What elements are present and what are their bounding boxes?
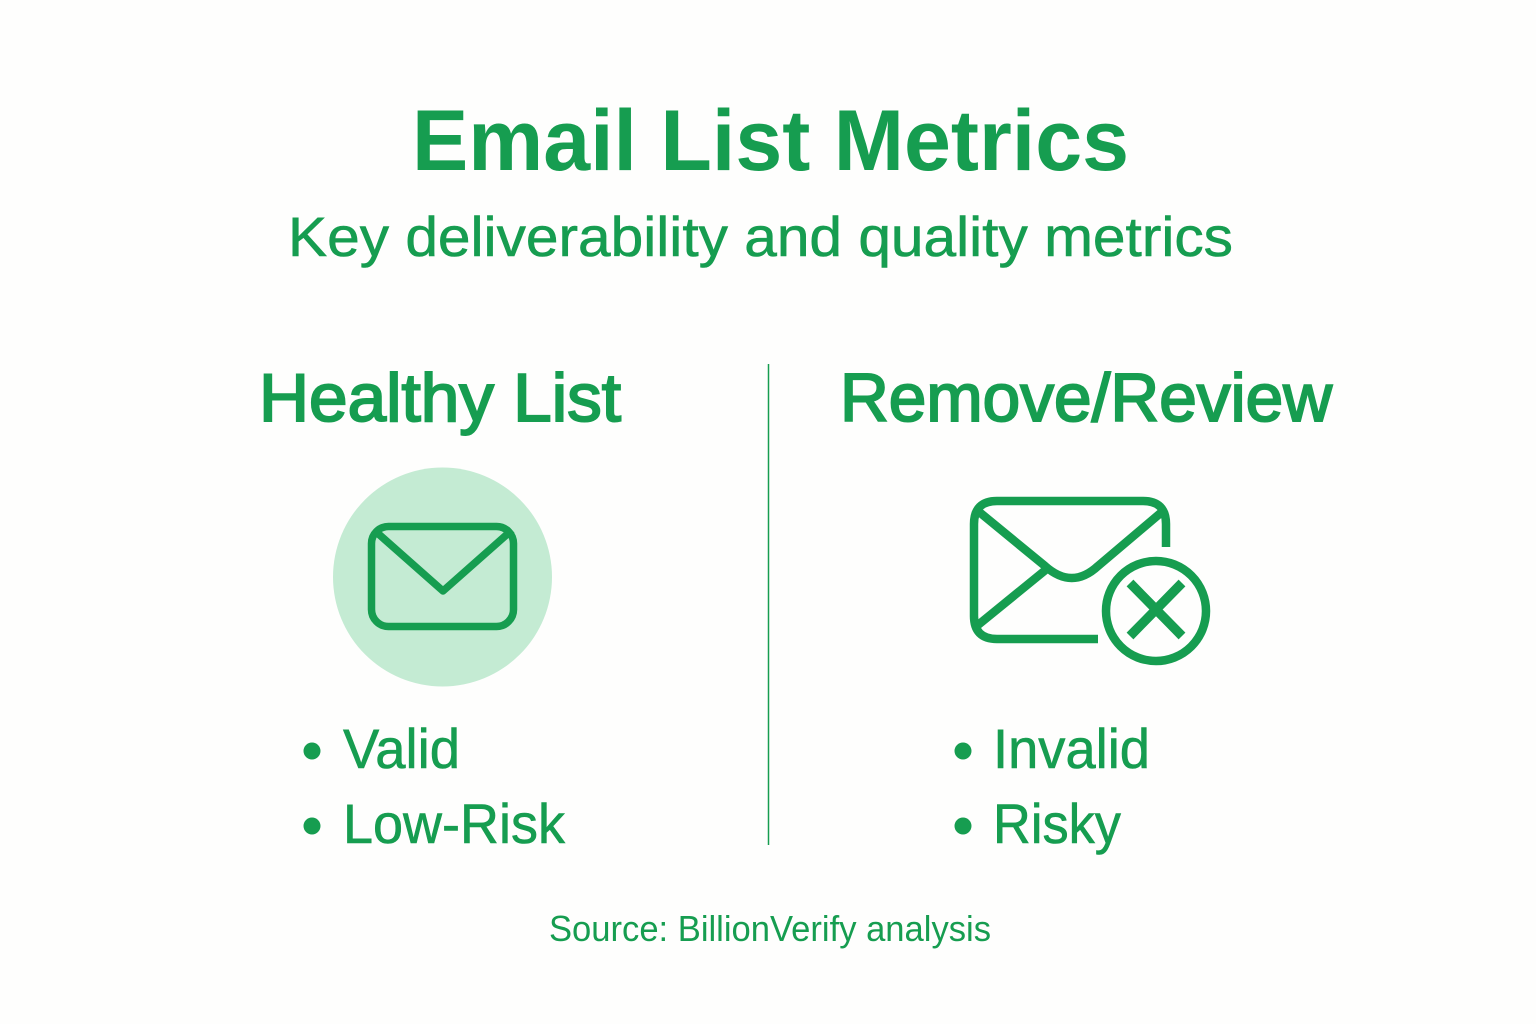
bullet list: healthy xyxy=(304,717,566,855)
panel: healthy list xyxy=(259,360,621,855)
title: Email List Metrics xyxy=(412,93,1129,189)
heading: remove/review: Remove/Review xyxy=(840,360,1333,436)
bullet item: low-risk: Low-Risk xyxy=(343,792,566,855)
bullet list: remove xyxy=(954,717,1150,855)
icon: envelope with x badge xyxy=(974,501,1206,661)
bullet item: invalid: Invalid xyxy=(993,717,1150,780)
panel: remove/review xyxy=(840,360,1333,855)
bullet item: valid: Valid xyxy=(343,717,460,780)
subtitle: Key deliverability and quality metrics xyxy=(288,205,1233,268)
source note: Source: BillionVerify analysis xyxy=(549,908,991,949)
heading: healthy list: Healthy List xyxy=(259,360,621,436)
icon: envelope in light green circle xyxy=(333,468,552,686)
bullet item: risky: Risky xyxy=(993,792,1121,855)
